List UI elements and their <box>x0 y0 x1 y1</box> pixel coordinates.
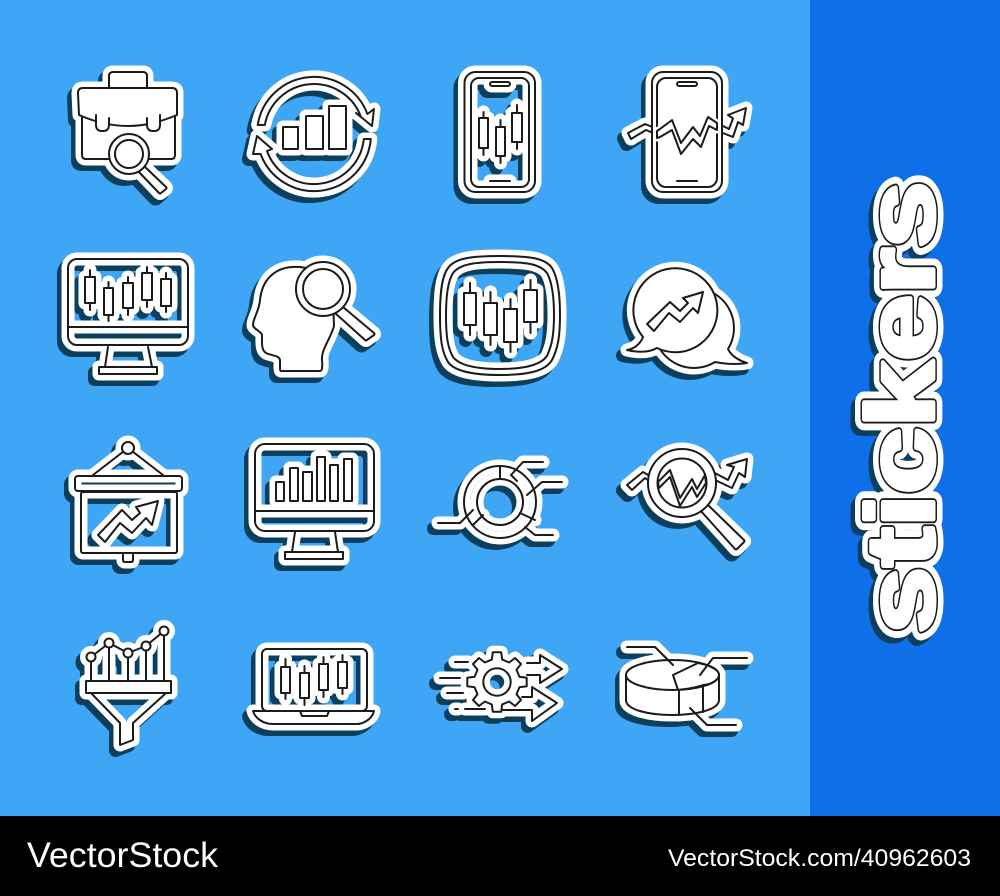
icon: rounded frame with candlesticks <box>436 256 560 380</box>
icon: funnel with line chart <box>82 626 171 750</box>
icon: laptop with candlesticks <box>248 649 374 730</box>
icon: magnifier with wave arrow <box>622 449 747 555</box>
icon: bar chart in refresh arrows <box>248 77 374 197</box>
icon: donut chart with callouts <box>434 462 562 544</box>
heading: stickers vertical title: stickers <box>848 182 954 634</box>
icon: 3D pie chart with callouts <box>622 647 747 730</box>
footer bar <box>0 816 1000 896</box>
icon: briefcase with magnifier <box>74 72 177 199</box>
footer image id: VectorStock.com/40962603 <box>668 845 971 872</box>
icon: monitor with bar chart <box>250 444 374 564</box>
footer brand: VectorStock <box>27 836 219 875</box>
side panel: dark blue <box>810 0 1000 816</box>
heading: stickers vertical title: stickers <box>848 182 954 634</box>
heading: stickers vertical title: stickers <box>848 182 954 634</box>
heading: stickers vertical title: stickers <box>843 187 950 639</box>
icon: presentation board with rising arrow <box>70 442 182 568</box>
background panel: light blue <box>0 0 810 816</box>
icon: smartphone with candlesticks <box>460 72 535 198</box>
icon: smartphone with rising wave arrow <box>624 72 746 198</box>
icon: head with magnifier <box>248 262 374 376</box>
icon: speech bubbles with rising arrow <box>622 268 747 373</box>
icon: monitor with candlesticks <box>64 259 188 380</box>
icon: gear with motion arrows <box>436 652 562 726</box>
